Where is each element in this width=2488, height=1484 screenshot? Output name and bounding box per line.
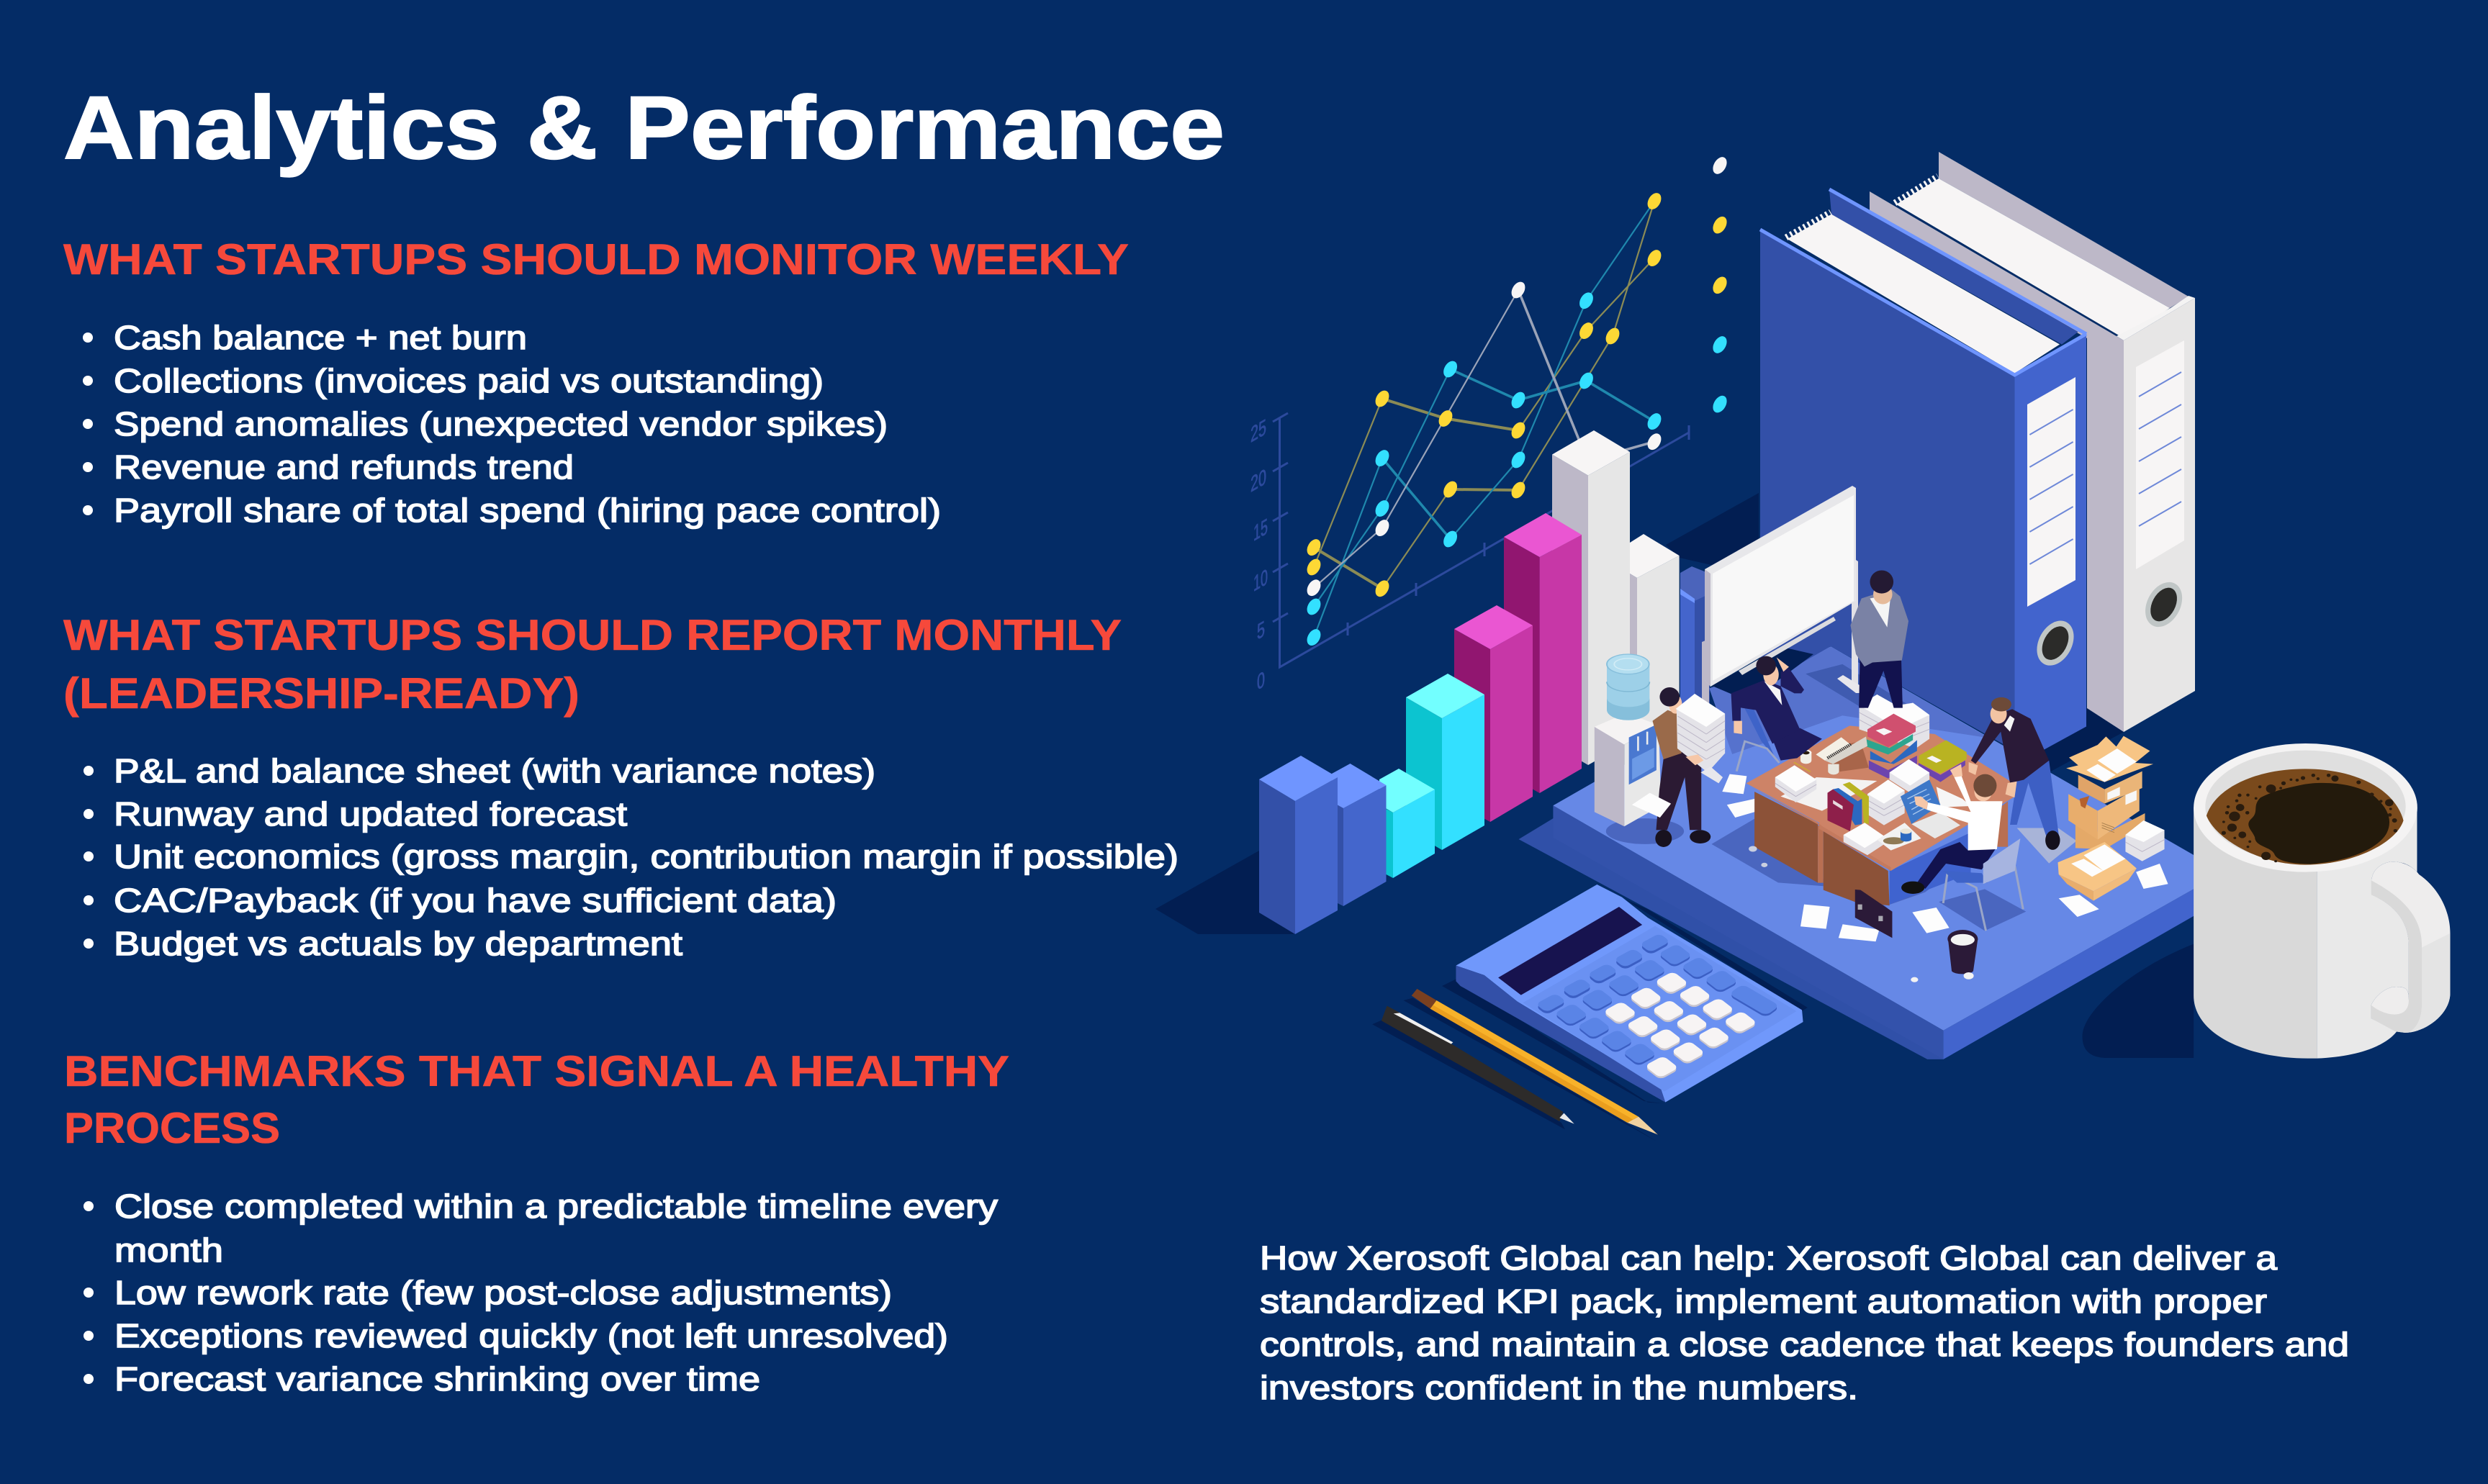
- panel: report monthly: [63, 611, 1178, 962]
- axis numbers: 15: [1253, 514, 1268, 546]
- mug rim and coffee: [2194, 743, 2417, 872]
- axis numbers: 20: [1250, 463, 1266, 497]
- desk papers: [1775, 695, 1929, 811]
- heading: report monthly: [63, 611, 1122, 718]
- text block: how Xerosoft Global can help: [1260, 1239, 2349, 1406]
- illustration: whiteboard: [1702, 486, 1863, 704]
- chart data points: [1305, 155, 1728, 647]
- mug body: [2194, 807, 2450, 1059]
- axis numbers: 0: [1257, 666, 1265, 695]
- list: benchmark items: Forecast variance shrinking over time: [114, 1360, 760, 1398]
- list: weekly items: Collections (invoices paid vs outstanding): [114, 362, 824, 399]
- blue tall bar: [1259, 756, 1338, 934]
- list: benchmark items: Exceptions reviewed quickly (not left unresolved): [114, 1317, 948, 1354]
- illustration: water cooler: [1595, 654, 1661, 826]
- list: weekly items: Revenue and refunds trend: [114, 448, 574, 486]
- list: benchmark items: Close completed within a predictable timeline every: [114, 1187, 998, 1225]
- list: weekly items: Cash balance + net burn: [114, 319, 527, 356]
- text block: how Xerosoft Global can help: standardized KPI pack, implement automation with proper: [1260, 1282, 2267, 1320]
- illustration: waste bin: [1749, 846, 1978, 982]
- illustration: standing person in gray blazer: [1850, 570, 1908, 708]
- list: weekly items: Spend anomalies (unexpected vendor spikes): [114, 405, 888, 443]
- bar shadow: [1155, 851, 1296, 934]
- list: benchmark items: month: [114, 1231, 223, 1269]
- illustration: white binder: [1870, 152, 2195, 774]
- list: monthly items: CAC/Payback (if you have sufficient data): [114, 882, 837, 919]
- illustration: pen and pencil: [1372, 989, 1661, 1141]
- list: weekly items: [83, 319, 941, 529]
- cyan small bar: [1379, 769, 1435, 878]
- blue laptop: [1901, 779, 1960, 838]
- white tall bar: [1552, 430, 1630, 765]
- calculator keys: [1537, 934, 1778, 1079]
- heading: report monthly: (LEADERSHIP-READY): [63, 669, 580, 718]
- chart series lines: [1314, 202, 1654, 638]
- heading: benchmarks: [64, 1047, 1009, 1152]
- briefcase: [1855, 890, 1892, 938]
- illustration: isometric platform: [1519, 646, 2196, 1059]
- text block: how Xerosoft Global can help: investors confident in the numbers.: [1260, 1369, 1858, 1406]
- heading: benchmarks: PROCESS: [64, 1104, 280, 1152]
- list: monthly items: P&L and balance sheet (with variance notes): [114, 752, 875, 789]
- illustration: background blue block: [1666, 493, 1759, 734]
- laptop and cups: [1793, 736, 1867, 774]
- desk: [1746, 725, 2025, 905]
- list: monthly items: Budget vs actuals by department: [114, 925, 682, 962]
- heading: monitor weekly: WHAT STARTUPS SHOULD MONITOR WEEKLY: [63, 235, 1129, 284]
- illustration: calculator: [1442, 884, 1808, 1103]
- more paper stacks and front folders: [1828, 759, 1971, 855]
- list: monthly items: Unit economics (gross margin, contribution margin if possible): [114, 838, 1178, 875]
- calculator display: [1498, 907, 1642, 995]
- magenta tall bar: [1504, 513, 1582, 793]
- white short bar: [1630, 534, 1680, 734]
- axis numbers: 10: [1253, 564, 1268, 596]
- text block: how Xerosoft Global can help: controls, and maintain a close cadence that keeps founders and: [1260, 1326, 2349, 1363]
- magenta small bar: [1454, 605, 1533, 822]
- pencil: [1412, 989, 1661, 1136]
- chart axes: [1273, 413, 1689, 667]
- text block: how Xerosoft Global can help: How Xerosoft Global can help: Xerosoft Global can deliver a: [1260, 1239, 2277, 1277]
- illustration: coffee mug: [2083, 743, 2450, 1059]
- stacked folders: [1865, 714, 1967, 782]
- axis numbers: 25: [1250, 414, 1266, 447]
- list: benchmark items: Low rework rate (few post-close adjustments): [114, 1274, 892, 1311]
- panel: benchmarks: [64, 1047, 1009, 1398]
- illustration: person leaning over desk: [1969, 697, 2060, 850]
- axis numbers: [1250, 414, 1268, 695]
- illustration: desk with papers and binders: [1722, 695, 2025, 941]
- list: weekly items: Payroll share of total spend (hiring pace control): [114, 492, 941, 529]
- mug shadow: [2083, 944, 2316, 1058]
- list: monthly items: Runway and updated forecast: [114, 795, 627, 833]
- axis numbers: 5: [1257, 616, 1265, 644]
- title: Analytics & Performance: [63, 78, 1225, 178]
- list: monthly items: [84, 752, 1178, 962]
- loose papers on floor: [1722, 774, 1950, 941]
- illustration: seated person in navy suit: [1731, 656, 1822, 772]
- illustration: seated person in white shirt: [1901, 764, 2023, 931]
- pen: [1382, 1006, 1574, 1124]
- list: benchmark items: [84, 1187, 998, 1398]
- heading: benchmarks: BENCHMARKS THAT SIGNAL A HEALTHY: [64, 1047, 1009, 1095]
- illustration: person carrying papers: [1632, 687, 1725, 847]
- cyan tall bar: [1406, 674, 1484, 850]
- blue medium bar: [1332, 764, 1387, 906]
- line chart: [1250, 155, 1728, 695]
- heading: report monthly: WHAT STARTUPS SHOULD REPORT MONTHLY: [63, 611, 1122, 659]
- illustration: blue binder: [1760, 189, 2086, 766]
- illustration: cardboard boxes and papers: [2058, 736, 2168, 917]
- 3D bar chart: [1155, 430, 1680, 934]
- panel: monitor weekly: [63, 235, 1129, 529]
- mug handle: [2371, 861, 2450, 1033]
